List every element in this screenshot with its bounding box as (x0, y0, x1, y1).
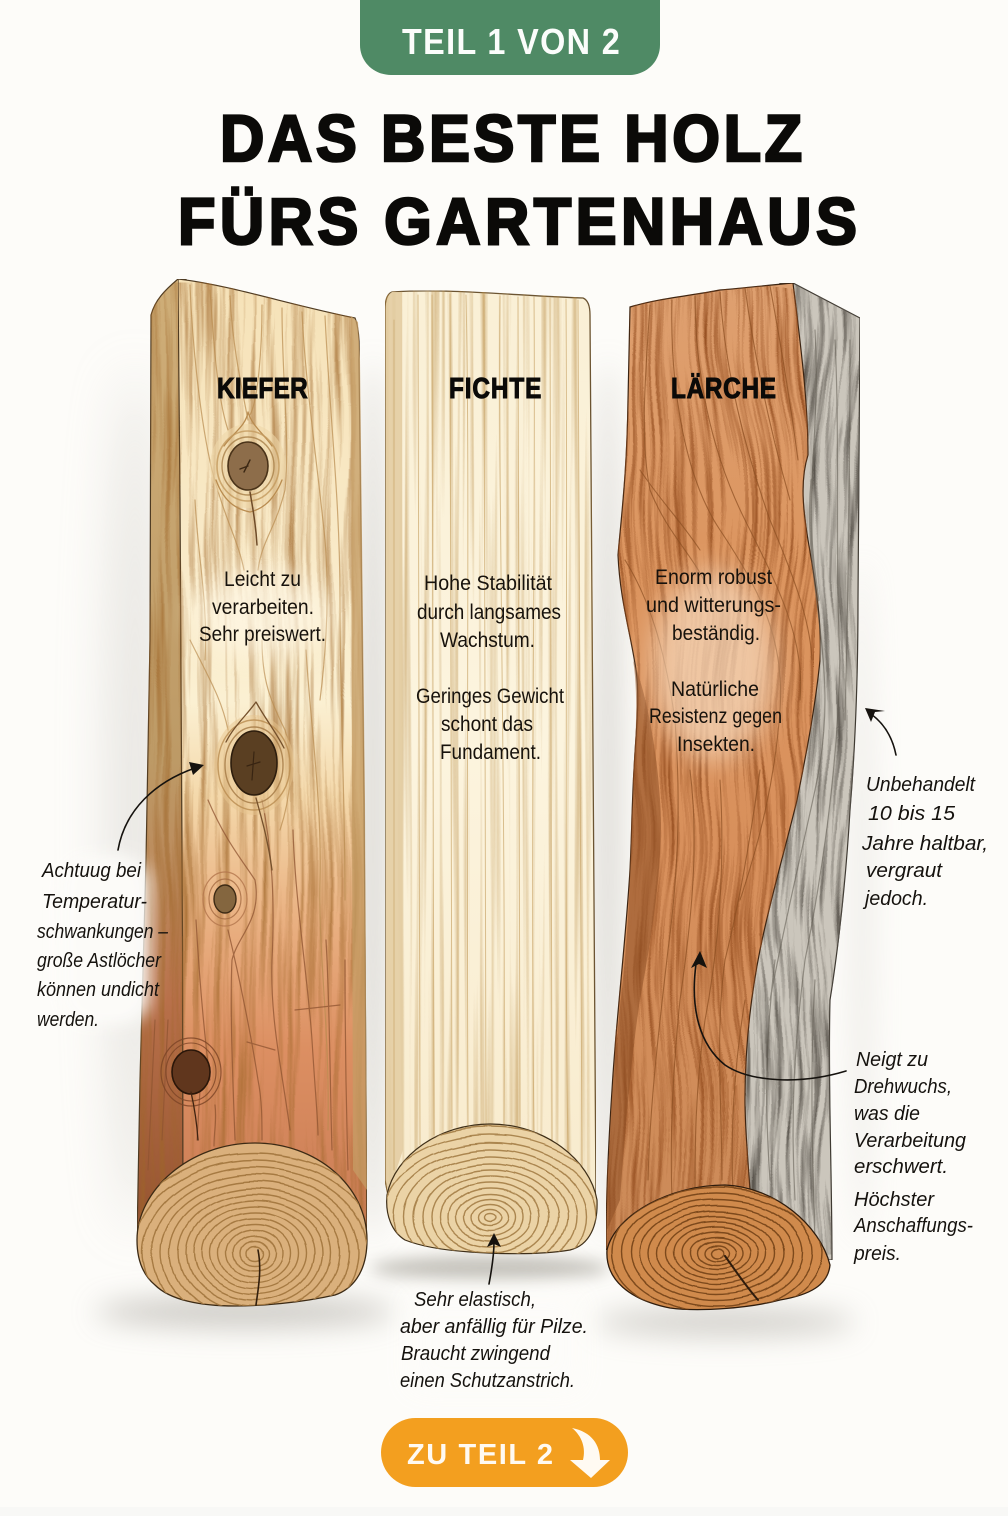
title (178, 101, 857, 258)
Lärche dark shaded flank (607, 660, 661, 1230)
callout: Lärche twist and cost (852, 1048, 973, 1265)
callout: Fichte weakness (400, 1288, 588, 1392)
arrow: durability callout to grey side (865, 708, 896, 755)
callout: Lärche durability: vergraut (866, 859, 943, 882)
top badge: Teil 1 von 2 (360, 0, 660, 75)
Fichte left side strip (386, 292, 403, 1195)
callout: Kiefer warning: werden. (37, 1008, 99, 1031)
callout: Lärche durability: jedoch. (862, 887, 928, 910)
Lärche front face (606, 283, 820, 1250)
cast shadows on paper (95, 360, 874, 1336)
callout: Kiefer warning: Achtuug bei (40, 859, 142, 882)
Kiefer knot 3 (203, 872, 247, 926)
callout: Kiefer warning: schwankungen – (37, 920, 168, 943)
callout: Lärche durability: Jahre haltbar, (861, 832, 988, 855)
callout: Lärche twist and cost: Drehwuchs, (854, 1075, 952, 1098)
Kiefer end crack (256, 1250, 260, 1305)
text: Lärche properties: beständig. (672, 622, 760, 645)
Fichte grain lines (394, 294, 582, 1170)
heading: Fichte: FICHTE (449, 372, 541, 404)
plank: Lärche (589, 283, 860, 1332)
Lärche end grain (606, 1184, 831, 1310)
arrow: Fichte callout to end grain (487, 1233, 501, 1284)
heading: Lärche: LÄRCHE (671, 372, 776, 404)
plank: Kiefer (136, 279, 368, 1307)
callout: Lärche twist and cost: erschwert. (854, 1155, 948, 1178)
callout: Lärche durability (861, 773, 988, 910)
top badge: Teil 1 von 2: TEIL 1 VON 2 (402, 22, 620, 62)
text: Kiefer properties (199, 568, 326, 646)
Kiefer front face (178, 279, 367, 1240)
text: Lärche properties: Resistenz gegen (649, 705, 782, 728)
text: Lärche properties (646, 566, 782, 756)
callout: Lärche twist and cost: Höchster (854, 1188, 935, 1211)
icon: curved down arrow (570, 1428, 610, 1478)
text: Kiefer properties: Leicht zu (224, 568, 301, 591)
bottom strip (0, 1507, 1008, 1516)
text: Fichte properties: durch langsames (417, 601, 561, 624)
arrow: Kiefer callout to knot (118, 762, 204, 850)
text: Fichte properties: Wachstum. (440, 629, 535, 652)
plank: Fichte (385, 290, 598, 1254)
Kiefer knot 1 (210, 412, 286, 545)
Fichte body (385, 291, 596, 1200)
text: Kiefer properties: verarbeiten. (212, 596, 314, 619)
callout: Fichte weakness: Braucht zwingend (401, 1342, 551, 1365)
Lärche end crack (725, 1256, 758, 1300)
Lärche bark strokes (767, 330, 850, 1240)
text: Fichte properties: Hohe Stabilität (424, 572, 552, 595)
callout: Kiefer warning (37, 859, 168, 1031)
heading: Kiefer: KIEFER (217, 372, 308, 404)
text: Lärche properties: und witterungs- (646, 594, 781, 617)
Lärche weathered grey side (740, 283, 860, 1260)
text: Fichte properties: Geringes Gewicht (416, 685, 564, 708)
text: Fichte properties (416, 572, 564, 764)
callout: Kiefer warning: große Astlöcher (37, 949, 162, 972)
callout: Fichte weakness: Sehr elastisch, (414, 1288, 536, 1311)
button: zu Teil 2 (381, 1418, 628, 1487)
text: Lärche properties: Enorm robust (655, 566, 772, 589)
Fichte end grain (386, 1123, 598, 1254)
Kiefer right edge strip (351, 316, 367, 1190)
text: Fichte properties: Fundament. (440, 741, 541, 764)
callout: Lärche twist and cost: Verarbeitung (854, 1129, 967, 1152)
Lärche grain lines (625, 286, 812, 1200)
callout: Kiefer warning: Temperatur- (42, 890, 147, 913)
callout: Kiefer warning: können undicht (37, 978, 160, 1001)
arrow: twist callout to front face (691, 951, 846, 1080)
callout: Lärche twist and cost: preis. (853, 1242, 901, 1265)
callout: Lärche twist and cost: Anschaffungs- (852, 1214, 973, 1237)
soft highlights behind text (60, 570, 776, 1390)
callout: Fichte weakness: aber anfällig für Pilze. (400, 1315, 588, 1338)
Kiefer side face (137, 279, 190, 1240)
text: Fichte properties: schont das (441, 713, 533, 736)
title: FÜRS GARTENHAUS (178, 184, 857, 258)
Kiefer knot 2 (214, 702, 294, 870)
text: Lärche properties: Natürliche (671, 678, 759, 701)
callout: Lärche durability: 10 bis 15 (868, 802, 956, 825)
callout: Lärche twist and cost: was die (854, 1102, 920, 1125)
button: zu Teil 2: ZU TEIL 2 (407, 1439, 553, 1471)
Kiefer end grain (136, 1142, 368, 1307)
title: DAS BESTE HOLZ (220, 101, 802, 175)
text: Lärche properties: Insekten. (677, 733, 755, 756)
text: Kiefer properties: Sehr preiswert. (199, 623, 326, 646)
Kiefer grain lines (190, 285, 345, 1130)
callout: Lärche durability: Unbehandelt (866, 773, 976, 796)
Kiefer knot 4 (161, 1038, 221, 1140)
callout: Lärche twist and cost: Neigt zu (856, 1048, 928, 1071)
callout: Fichte weakness: einen Schutzanstrich. (400, 1369, 575, 1392)
